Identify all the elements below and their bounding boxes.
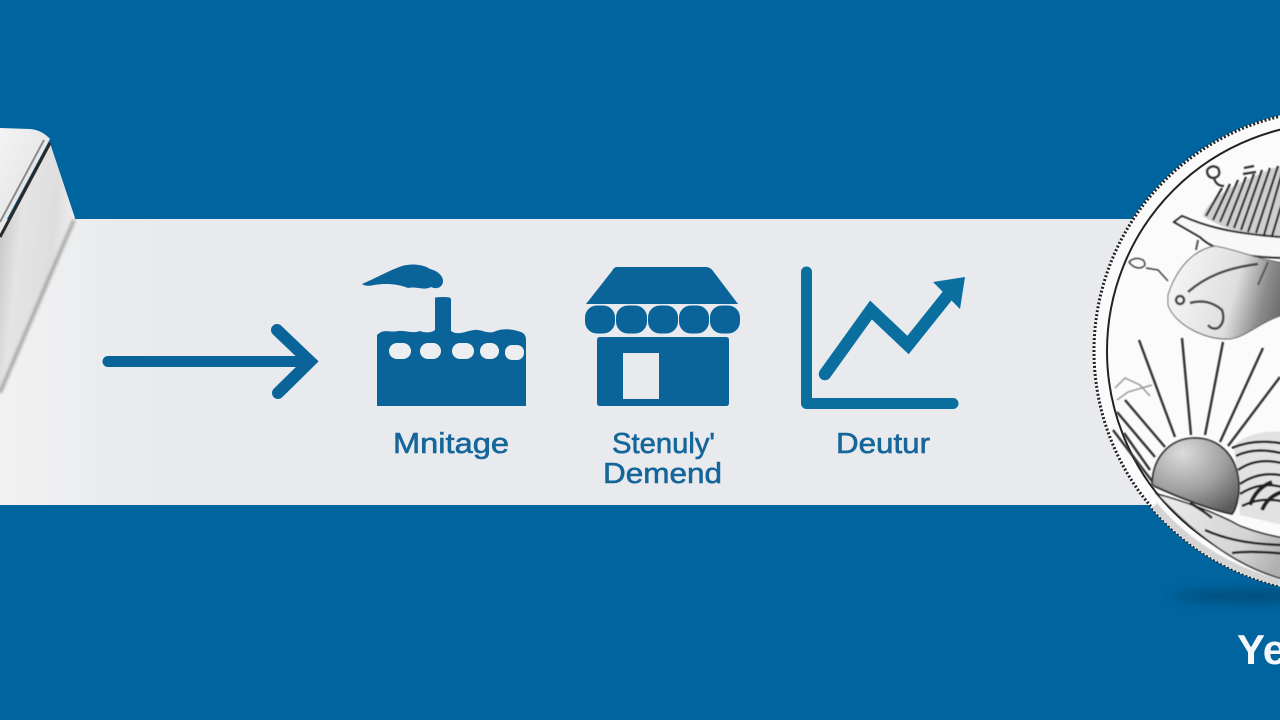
factory building: [377, 297, 526, 406]
coin shadow: [1170, 591, 1280, 601]
icon: storefront: [585, 267, 740, 406]
light horizontal band: [0, 219, 1280, 505]
label: Deutur: Deutur: [836, 428, 930, 460]
sun rays: [1113, 338, 1280, 485]
hand or head form: [1168, 246, 1280, 339]
plume band: [1174, 216, 1280, 258]
label: Mnitage: Mnitage: [393, 428, 509, 460]
cloth fold lines: [1190, 503, 1280, 555]
coin body: [1093, 109, 1280, 593]
coin reeded edge: [1094, 110, 1280, 592]
silver bar: [0, 128, 75, 393]
infographic canvas: [0, 114, 1280, 664]
wing line sketch: [1115, 378, 1152, 400]
factory windows: [389, 343, 524, 360]
lower rim shading: [1150, 503, 1280, 589]
smoke plume: [362, 265, 443, 289]
wavy ground hatch: [1232, 431, 1280, 528]
coin inner ring: [1107, 123, 1280, 579]
coin engraving: [1113, 160, 1280, 589]
arrow: [108, 330, 310, 393]
draped cloth: [1157, 494, 1280, 582]
label: Stenuly' Demend: Stenuly': [612, 428, 715, 460]
label: Stenuly' Demend: [603, 428, 722, 490]
awning scallops: [585, 306, 740, 334]
awning roof: [586, 267, 738, 304]
icon: factory: [362, 265, 526, 406]
silver coin: [1093, 109, 1280, 593]
form contour: [1176, 264, 1258, 329]
icon: rising line chart: [806, 272, 965, 404]
shop body with door: [597, 337, 729, 406]
small tendril: [1129, 258, 1168, 281]
sun globe: [1152, 438, 1239, 514]
hatched plumage: [1203, 160, 1280, 240]
label: Stenuly' Demend: Demend: [603, 458, 722, 490]
